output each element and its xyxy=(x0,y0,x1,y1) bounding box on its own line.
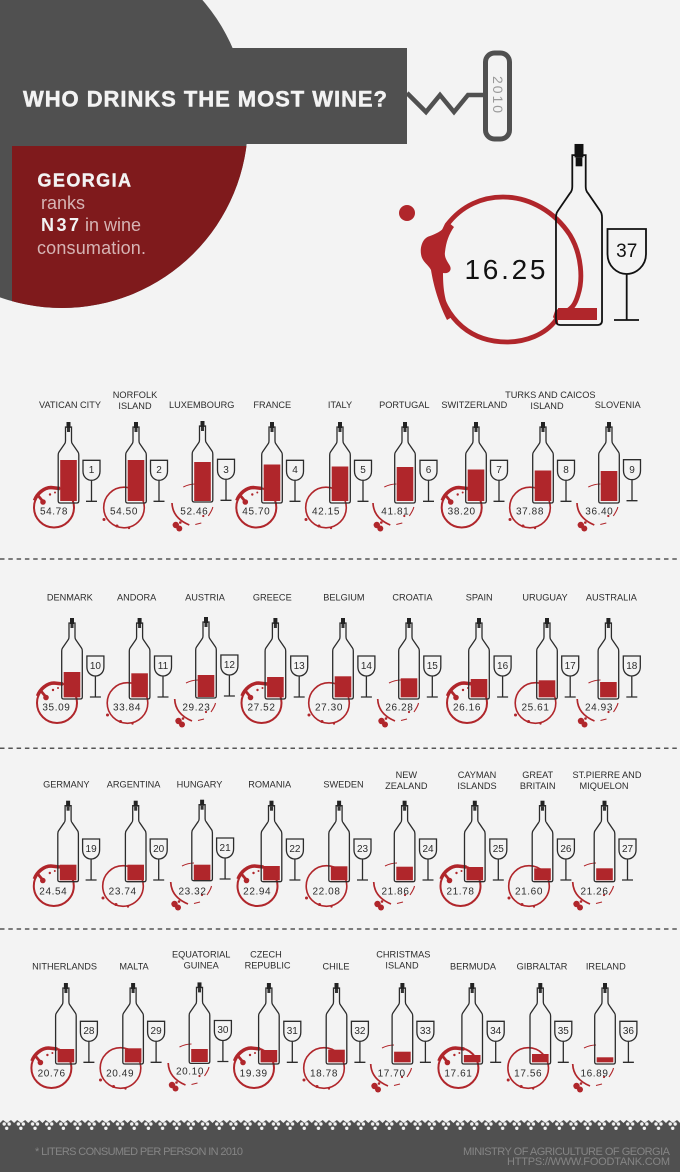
value: 26.28 xyxy=(385,703,413,714)
bottle xyxy=(598,618,619,699)
icon: corkscrew with year: 2010 xyxy=(490,76,506,113)
name: IRELAND xyxy=(586,962,626,972)
country: Bermuda xyxy=(438,962,504,1088)
bottle xyxy=(399,618,419,699)
bottle xyxy=(196,617,216,698)
value: 17.70 xyxy=(378,1069,406,1080)
bottle xyxy=(462,983,483,1064)
glass and rank: 20 xyxy=(153,844,165,855)
name: NORFOLK xyxy=(113,390,158,400)
name: CROATIA xyxy=(392,592,433,602)
country: Sweden xyxy=(305,780,371,908)
stain xyxy=(31,1048,71,1088)
glass and rank: 34 xyxy=(490,1026,502,1037)
name: ISLANDS xyxy=(457,781,497,791)
callout line: consumation: consumation. xyxy=(37,238,146,258)
value: 26.16 xyxy=(453,703,481,714)
stain xyxy=(34,488,74,528)
bottle xyxy=(259,983,279,1064)
country: Slovenia xyxy=(577,400,642,532)
country: Croatia xyxy=(378,592,441,728)
name: ISLAND xyxy=(385,960,419,970)
source credit: HTTPS://WWW.FOODTANK.COM xyxy=(507,1156,670,1168)
name: ISLAND xyxy=(118,401,152,411)
name: GUINEA xyxy=(184,960,220,970)
glass and rank: 16 xyxy=(497,661,509,672)
value: 41.81 xyxy=(381,506,409,517)
bottle xyxy=(469,618,489,699)
bottle xyxy=(189,982,210,1063)
country: Turks and Caicos Island xyxy=(505,390,595,529)
country: Gibraltar xyxy=(507,962,572,1090)
stain xyxy=(447,683,487,723)
value: 22.94 xyxy=(243,886,271,897)
value: 19.39 xyxy=(240,1069,268,1080)
value: 38.20 xyxy=(448,506,476,517)
row 4 xyxy=(31,950,637,1092)
stain xyxy=(573,863,614,910)
name: EQUATORIAL xyxy=(172,950,230,960)
country: Czech Republic xyxy=(234,950,301,1088)
value: 54.78 xyxy=(40,506,68,517)
name: BERMUDA xyxy=(450,962,497,972)
value: 16.89 xyxy=(580,1069,609,1080)
country: Nitherlands xyxy=(31,962,97,1088)
stain xyxy=(438,1048,478,1088)
stain xyxy=(242,683,282,723)
value: 27.30 xyxy=(315,703,343,714)
value: 21.86 xyxy=(381,886,410,897)
name: ZEALAND xyxy=(385,781,428,791)
stain xyxy=(374,863,414,910)
stain xyxy=(308,683,349,725)
stain xyxy=(514,683,556,725)
bottle xyxy=(126,422,146,503)
glass and rank: 4 xyxy=(292,465,298,476)
name: BELGIUM xyxy=(323,592,365,602)
panel: Georgia callout xyxy=(12,146,246,308)
country: Spain xyxy=(447,592,511,723)
callout line: rank number: in wine xyxy=(85,215,141,235)
glass and rank: 14 xyxy=(361,661,372,672)
bottle xyxy=(594,801,615,882)
glass and rank: 8 xyxy=(563,465,569,476)
stain xyxy=(102,866,143,908)
stain xyxy=(102,487,144,529)
name: MALTA xyxy=(119,962,150,972)
glass and rank: 11 xyxy=(158,661,169,672)
country: Austria xyxy=(175,592,238,728)
footer band xyxy=(0,1118,680,1172)
stain xyxy=(175,680,216,728)
name: BRITAIN xyxy=(520,781,555,791)
stain xyxy=(168,1044,209,1092)
bottle xyxy=(330,422,350,503)
stain xyxy=(236,488,276,528)
bottle xyxy=(599,422,619,503)
bottle xyxy=(261,801,282,882)
glass and rank xyxy=(619,839,636,880)
name: TURKS AND CAICOS xyxy=(505,390,595,400)
value: 24.93 xyxy=(585,703,613,714)
glass and rank: 13 xyxy=(294,661,305,672)
glass and rank: 1 xyxy=(89,465,95,476)
glass and rank: 21 xyxy=(220,843,231,854)
bottle xyxy=(595,983,615,1064)
callout line: rank number: N37 xyxy=(41,215,79,235)
country: Malta xyxy=(99,962,165,1090)
row 3 xyxy=(34,770,642,910)
stain xyxy=(305,866,347,908)
value: 24.54 xyxy=(39,886,67,897)
glass and rank: 30 xyxy=(217,1025,229,1036)
country: Greece xyxy=(242,592,308,723)
glass and rank: 27 xyxy=(622,844,633,855)
glass and rank xyxy=(420,839,436,880)
title: WHO DRINKS THE MOST WINE? xyxy=(23,86,387,112)
country: Germany xyxy=(34,780,100,906)
name: SPAIN xyxy=(466,592,493,602)
name: ARGENTINA xyxy=(107,780,161,790)
bottle xyxy=(394,801,415,882)
name: FRANCE xyxy=(253,400,291,410)
callout line: rank number xyxy=(41,215,141,235)
stain xyxy=(37,683,77,723)
value: 21.26 xyxy=(580,886,609,897)
bottle xyxy=(56,983,76,1064)
glass and rank: 35 xyxy=(558,1026,569,1037)
value: 42.15 xyxy=(312,506,340,517)
bottle xyxy=(129,618,150,699)
value: 36.40 xyxy=(585,506,613,517)
bottle xyxy=(532,801,553,882)
bottle xyxy=(62,618,82,699)
value: 33.84 xyxy=(113,703,141,714)
name: DENMARK xyxy=(47,592,94,602)
glass and rank: 17 xyxy=(565,661,576,672)
stain xyxy=(238,866,278,906)
name: CHRISTMAS xyxy=(376,950,430,960)
glass and rank: 28 xyxy=(83,1026,95,1037)
bottle xyxy=(533,422,553,503)
bottle xyxy=(58,422,79,503)
big glass with rank: 37 xyxy=(616,241,637,262)
name: ISLAND xyxy=(530,401,564,411)
name: AUSTRALIA xyxy=(586,592,638,602)
glass and rank: 7 xyxy=(496,465,502,476)
country: New Zealand xyxy=(374,770,436,910)
value: 29.23 xyxy=(182,703,210,714)
stain xyxy=(442,488,482,528)
name: MIQUELON xyxy=(579,781,629,791)
glass and rank: 3 xyxy=(223,465,229,476)
big glass with rank xyxy=(608,229,646,320)
name: NEW xyxy=(396,770,417,780)
stain xyxy=(507,1048,548,1090)
country: Portugal xyxy=(373,400,437,532)
bottle xyxy=(192,800,212,881)
glass and rank: 29 xyxy=(151,1026,162,1037)
name: CHILE xyxy=(322,962,350,972)
name: REPUBLIC xyxy=(245,960,291,970)
big wine stain xyxy=(399,197,581,342)
value: 23.74 xyxy=(109,886,137,897)
stain xyxy=(304,487,346,529)
country: Argentina xyxy=(102,780,167,908)
glass and rank: 23 xyxy=(357,844,368,855)
bottle xyxy=(392,983,413,1064)
value: 20.76 xyxy=(38,1069,66,1080)
bottle xyxy=(537,618,557,699)
name: PORTUGAL xyxy=(379,400,429,410)
stain xyxy=(106,683,148,725)
title banner xyxy=(0,48,407,144)
bottle xyxy=(125,801,146,882)
glass and rank: 32 xyxy=(354,1026,366,1037)
country: France xyxy=(236,400,304,528)
Georgia figure xyxy=(399,144,646,342)
name: GIBRALTAR xyxy=(517,962,568,972)
country: Norfolk Island xyxy=(102,390,168,529)
value: 35.09 xyxy=(42,703,70,714)
stain xyxy=(573,1045,614,1092)
name: NITHERLANDS xyxy=(32,962,97,972)
glass and rank: 15 xyxy=(427,661,438,672)
stain xyxy=(378,680,418,728)
country: Equatorial Guinea xyxy=(168,950,231,1092)
glass and rank: 10 xyxy=(90,661,101,672)
name: AUSTRIA xyxy=(185,592,226,602)
stain xyxy=(371,1045,412,1092)
name: SLOVENIA xyxy=(595,400,642,410)
icon: corkscrew with year xyxy=(407,53,510,139)
stain xyxy=(302,1048,344,1090)
value: 18.78 xyxy=(310,1069,338,1080)
glass and rank xyxy=(417,1021,434,1062)
value: 20.10 xyxy=(176,1066,204,1078)
name: ROMANIA xyxy=(248,780,292,790)
country: Chile xyxy=(302,962,368,1090)
name: SWEDEN xyxy=(323,780,364,790)
bottle xyxy=(464,801,485,882)
bottle xyxy=(192,421,213,502)
glass and rank: 31 xyxy=(287,1026,298,1037)
stain xyxy=(99,1048,141,1090)
bottle xyxy=(265,618,286,699)
glass and rank: 33 xyxy=(420,1026,431,1037)
glass and rank: 6 xyxy=(426,465,432,476)
stain xyxy=(577,680,618,728)
name: CAYMAN xyxy=(458,770,496,780)
row 1 xyxy=(34,390,642,532)
country: St. Pierre and Miquelon xyxy=(573,770,642,910)
value: 23.32 xyxy=(178,886,207,897)
glass and rank: 9 xyxy=(629,465,635,476)
bottle xyxy=(262,422,282,503)
country: Romania xyxy=(238,780,303,906)
bottle xyxy=(329,801,349,882)
country: Ireland xyxy=(573,962,637,1092)
stain xyxy=(171,863,212,910)
country: Cayman Islands xyxy=(440,770,507,906)
value: 22.08 xyxy=(312,886,341,897)
value: 20.49 xyxy=(106,1069,134,1080)
header circle: grey xyxy=(0,0,248,308)
name: GREECE xyxy=(253,592,292,602)
name: LUXEMBOURG xyxy=(169,400,234,410)
value: 17.61 xyxy=(444,1069,472,1080)
name: HUNGARY xyxy=(177,780,222,790)
country: Christmas Island xyxy=(371,950,434,1092)
value: 27.52 xyxy=(247,703,276,714)
name: GERMANY xyxy=(43,780,90,790)
value: 52.46 xyxy=(180,506,208,517)
country: Belgium xyxy=(308,592,375,725)
glass and rank xyxy=(214,1020,231,1062)
bottle xyxy=(123,983,143,1064)
glass and rank: 36 xyxy=(623,1026,634,1037)
bottle xyxy=(326,983,347,1064)
country: Andora xyxy=(106,592,172,725)
stain xyxy=(440,866,480,906)
country: Hungary xyxy=(171,780,234,910)
bottle xyxy=(466,422,486,503)
country: Luxembourg xyxy=(169,400,234,532)
country: Uruguay xyxy=(514,592,579,725)
callout line: ranks: ranks xyxy=(41,193,85,213)
value: 21.78 xyxy=(446,886,475,897)
big value: 16.25 xyxy=(464,254,546,285)
value: 21.60 xyxy=(515,886,543,897)
country: Denmark xyxy=(37,592,104,723)
name: ITALY xyxy=(328,400,352,410)
value: 25.61 xyxy=(521,703,550,714)
glass and rank: 26 xyxy=(560,844,572,855)
name: VATICAN CITY xyxy=(39,400,101,410)
country: Italy xyxy=(304,400,372,529)
stain xyxy=(234,1048,274,1088)
source credit: MINISTRY OF AGRICULTURE OF GEORGIA xyxy=(463,1146,671,1158)
glass and rank: 18 xyxy=(626,661,638,672)
callout heading: GEORGIA xyxy=(38,170,131,190)
stain xyxy=(508,866,549,908)
country: Switzerland xyxy=(441,400,508,528)
glass and rank: 19 xyxy=(86,844,97,855)
glass and rank: 12 xyxy=(224,660,235,671)
name: GREAT xyxy=(522,770,554,780)
stain xyxy=(172,484,213,532)
bottle xyxy=(333,618,353,699)
glass and rank: 22 xyxy=(289,844,301,855)
value: 45.70 xyxy=(242,506,270,517)
stain xyxy=(508,487,550,529)
glass and rank: 24 xyxy=(422,844,434,855)
country: Australia xyxy=(577,592,640,728)
row 2 xyxy=(37,592,640,728)
name: CZECH xyxy=(250,950,282,960)
big bottle xyxy=(556,144,602,325)
bottle xyxy=(395,422,415,503)
stain xyxy=(34,866,74,906)
bottle xyxy=(530,983,551,1064)
name: ANDORA xyxy=(117,592,157,602)
value: 17.56 xyxy=(514,1069,542,1080)
glass and rank: 2 xyxy=(156,465,162,476)
bottle xyxy=(58,801,78,882)
stain xyxy=(373,484,414,532)
value: 37.88 xyxy=(516,506,544,517)
glass and rank: 5 xyxy=(360,465,366,476)
name: ST.PIERRE AND xyxy=(573,770,642,780)
name: SWITZERLAND xyxy=(441,400,508,410)
footnote: * LITERS CONSUMED PER PERSON IN 2010 xyxy=(35,1146,243,1158)
country: Vatican City xyxy=(34,400,101,528)
name: URUGUAY xyxy=(522,592,568,602)
glass and rank: 25 xyxy=(493,844,504,855)
country: Great Britain xyxy=(508,770,574,908)
value: 54.50 xyxy=(110,506,138,517)
stain xyxy=(577,484,618,532)
